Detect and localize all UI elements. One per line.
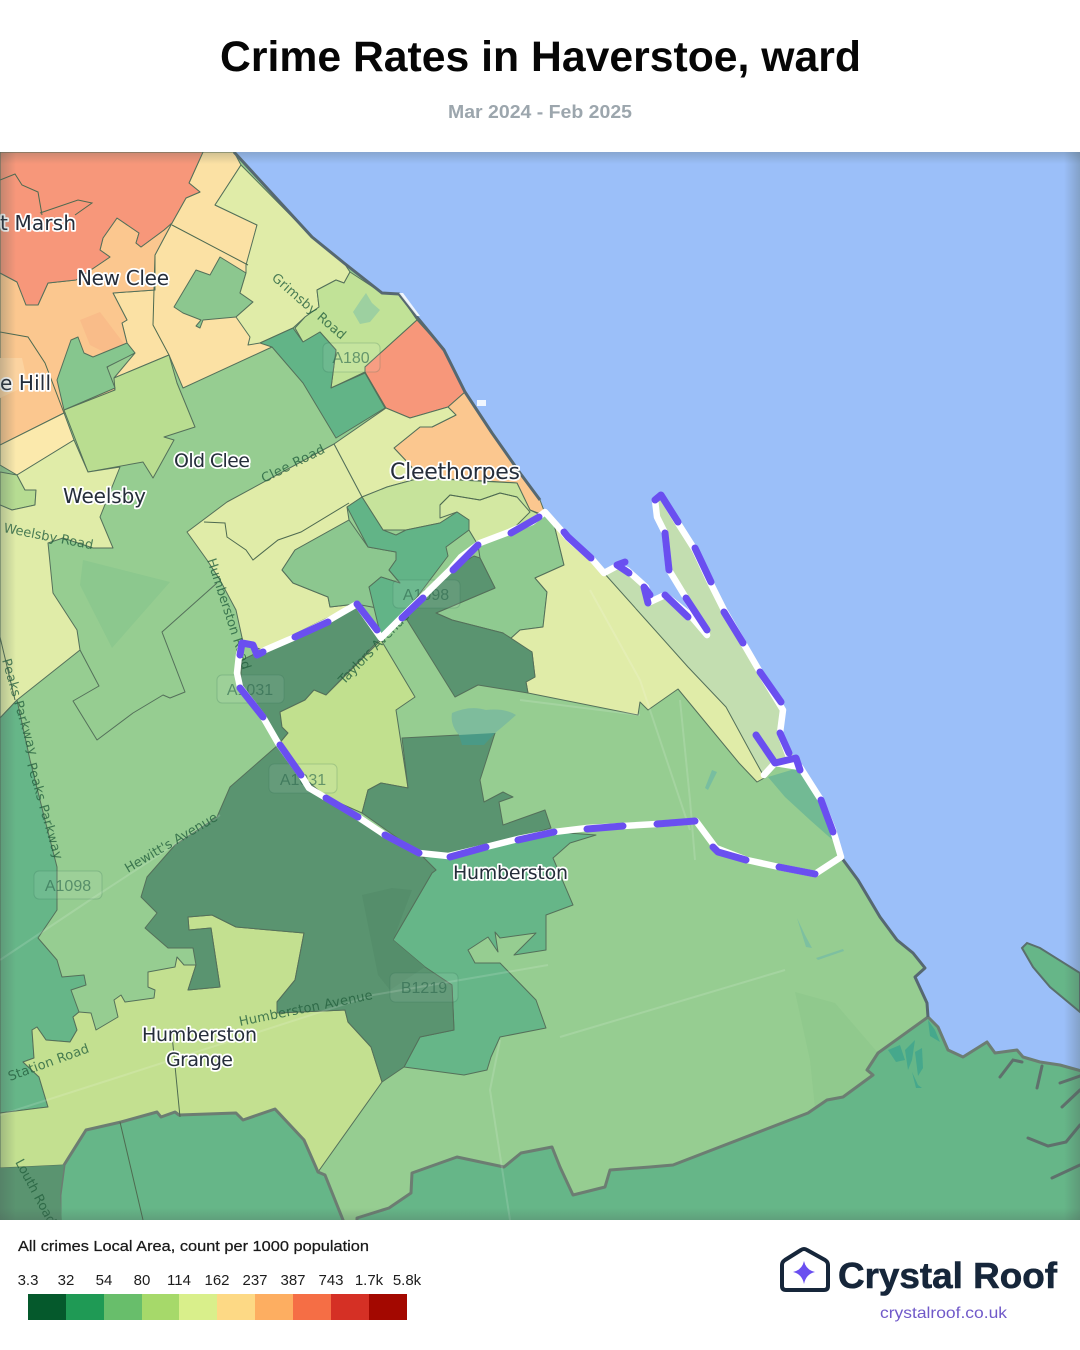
road shields bbox=[34, 343, 460, 1002]
darker inner patch west bbox=[80, 560, 170, 648]
road numbers: A1098 bbox=[403, 587, 449, 604]
legend value labels: 3.3 bbox=[18, 1272, 38, 1289]
logo: Crystal Roof bbox=[782, 1249, 1058, 1322]
SE marsh patch bbox=[768, 770, 832, 840]
place labels: e Hill bbox=[0, 371, 51, 395]
road name labels: Peaks Parkway bbox=[23, 761, 65, 862]
ward boundary: purple dashes bbox=[240, 495, 833, 874]
legend value labels: 54 bbox=[96, 1272, 112, 1289]
road numbers: B1219 bbox=[401, 980, 447, 997]
legend value labels: 237 bbox=[242, 1272, 268, 1289]
medium green NE in ward bbox=[437, 528, 564, 638]
minor roads bbox=[0, 590, 785, 1220]
darker patch in dark ward bbox=[362, 888, 425, 990]
road name labels: Grimsby Road bbox=[268, 271, 348, 343]
Weelsby yellow green bbox=[0, 440, 120, 718]
dark south west corner bbox=[0, 1165, 64, 1222]
place labels: Humberston bbox=[453, 862, 568, 884]
Cleethorpes orange bbox=[394, 392, 546, 516]
dark ward south west bbox=[141, 745, 454, 1082]
area polygons north bbox=[0, 152, 766, 1172]
bottom green areas with thick boundary bbox=[60, 1017, 1080, 1225]
light green park ward bbox=[295, 272, 417, 388]
legend title: All crimes Local Area, count per 1000 population bbox=[18, 1238, 369, 1255]
road numbers: A1031 bbox=[227, 682, 273, 699]
title: Crime Rates in Haverstoe, ward bbox=[220, 33, 861, 81]
red ward coast bbox=[365, 320, 465, 418]
dark mint north of ward bbox=[347, 497, 469, 637]
Humberston mint bbox=[393, 832, 596, 1075]
dark ward north west bbox=[240, 605, 381, 745]
park pond bbox=[353, 293, 380, 324]
road numbers: A1031 bbox=[280, 772, 326, 789]
legend value labels: 162 bbox=[204, 1272, 230, 1289]
road name labels bbox=[0, 271, 413, 1227]
ward boundary: white outline bbox=[237, 495, 841, 874]
legend value labels: 743 bbox=[318, 1272, 344, 1289]
legend value labels: 32 bbox=[58, 1272, 74, 1289]
pale yellow wards bbox=[113, 152, 272, 388]
wetland patches bbox=[888, 1020, 940, 1088]
road name labels: Clee Road bbox=[259, 442, 328, 487]
place labels bbox=[0, 211, 568, 1071]
inner ward borders bbox=[0, 174, 517, 1220]
road numbers: A180 bbox=[332, 350, 370, 367]
light green block bbox=[64, 355, 195, 478]
legend colour scale bbox=[28, 1294, 407, 1320]
deeper orange patch bbox=[80, 312, 125, 352]
road name labels: Humberston Avenue bbox=[238, 988, 374, 1030]
pale strip west bbox=[0, 413, 74, 475]
coast inlets bbox=[1000, 1060, 1080, 1178]
road name labels: Hewitt's Avenue bbox=[122, 810, 221, 876]
pale green strip east bbox=[440, 493, 530, 545]
road name labels: Taylors Avenue bbox=[335, 609, 413, 688]
light ward centre bbox=[278, 640, 415, 813]
medium blob bbox=[282, 520, 400, 608]
place labels: Cleethorpes bbox=[390, 460, 520, 485]
subtitle: date range: Mar 2024 - Feb 2025 bbox=[448, 102, 632, 122]
land base bbox=[0, 158, 926, 1220]
small island bbox=[1022, 943, 1080, 1012]
logo wordmark: Crystal Roof bbox=[838, 1255, 1058, 1296]
legend value labels: 114 bbox=[167, 1272, 191, 1289]
dark ward north east bbox=[404, 556, 535, 697]
panel: choropleth map bbox=[0, 152, 1080, 1227]
legend value labels: 387 bbox=[280, 1272, 306, 1289]
legend value labels: 5.8k bbox=[393, 1272, 422, 1289]
road name labels: Station Road bbox=[6, 1042, 91, 1085]
road name labels: Humberston Road bbox=[203, 557, 253, 672]
road numbers bbox=[45, 350, 449, 997]
south west green block bbox=[60, 1109, 345, 1225]
place labels: New Clee bbox=[77, 266, 169, 290]
mint left strip bbox=[0, 700, 86, 1113]
lake and ponds bbox=[452, 708, 844, 960]
place labels: Weelsby bbox=[63, 484, 146, 508]
road name labels: Weelsby Road bbox=[2, 521, 94, 553]
icon: house with star bbox=[782, 1249, 828, 1290]
small west green bbox=[0, 472, 36, 510]
map edge shading bbox=[0, 152, 1080, 1220]
light green strip bbox=[362, 478, 543, 545]
yellow green strip bbox=[334, 407, 456, 497]
road numbers: A1098 bbox=[45, 878, 91, 895]
legend value labels bbox=[18, 1272, 422, 1289]
pale patch at Hill bbox=[0, 358, 28, 398]
south east green area bbox=[357, 1017, 1080, 1225]
sea bbox=[236, 152, 1080, 1069]
legend value labels: 1.7k bbox=[355, 1272, 384, 1289]
road name labels: Louth Road bbox=[11, 1157, 59, 1227]
legend value labels: 80 bbox=[134, 1272, 150, 1289]
place labels: Humberston bbox=[142, 1024, 257, 1046]
coastal white marks bbox=[399, 293, 486, 406]
coastline bbox=[234, 152, 928, 1017]
red ward north west bbox=[0, 152, 203, 305]
dark green north bbox=[260, 328, 385, 438]
place labels: Old Clee bbox=[174, 450, 250, 472]
SE land lighter patch bbox=[795, 992, 878, 1108]
Humberston Grange light green bbox=[0, 915, 382, 1172]
orange wards west bbox=[0, 218, 172, 445]
green blob north bbox=[174, 257, 253, 328]
website link: crystalroof.co.uk bbox=[880, 1305, 1008, 1322]
inner boundary west bbox=[73, 583, 217, 740]
dark ward south centre bbox=[362, 733, 551, 856]
yellow green south of Clee Road bbox=[187, 444, 362, 650]
place labels: t Marsh bbox=[0, 211, 76, 235]
green blob west bbox=[57, 337, 135, 410]
place labels: Grange bbox=[166, 1049, 233, 1071]
coastal saltmarsh reed area bbox=[604, 495, 800, 775]
yellow green north coast bbox=[215, 165, 350, 345]
legend bbox=[18, 1238, 422, 1320]
yellow green coastal strip bbox=[509, 520, 766, 782]
